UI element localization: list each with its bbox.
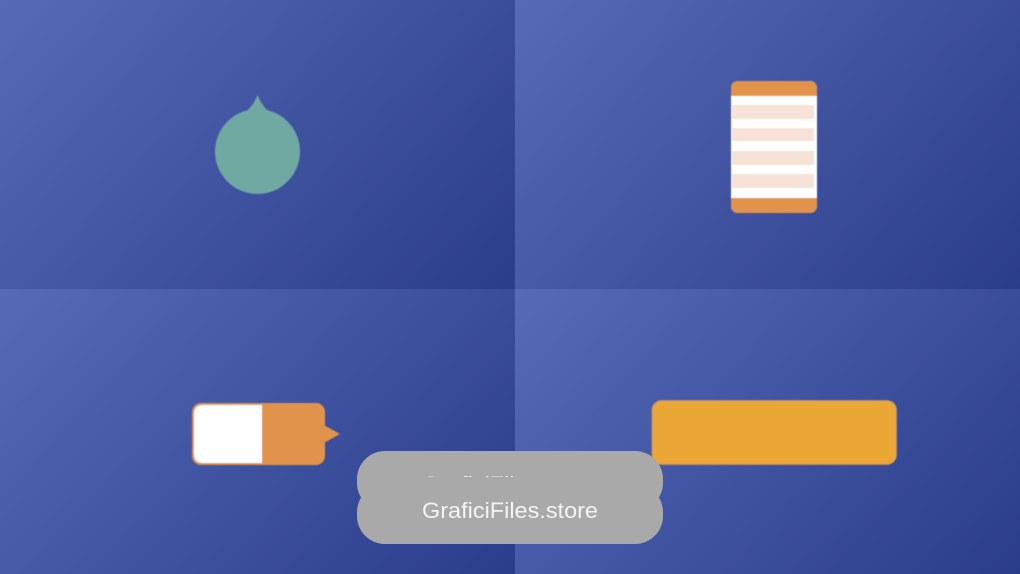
icon: half-filled orange callout xyxy=(192,403,340,465)
watermark text: clipped: GraficiFiles.store xyxy=(422,472,598,497)
panel: bottom left xyxy=(0,289,515,574)
icon: amber rounded bar xyxy=(652,401,896,464)
panel: top left xyxy=(0,0,515,289)
panel: top right xyxy=(515,0,1020,289)
panel: bottom right xyxy=(515,289,1020,574)
watermark text: GraficiFiles.store xyxy=(422,498,598,523)
icon: teal teardrop circle xyxy=(215,95,300,194)
watermark badge: front pill xyxy=(357,484,663,544)
icon: striped orange card xyxy=(731,81,817,213)
watermark badge: rear pill xyxy=(357,451,663,498)
